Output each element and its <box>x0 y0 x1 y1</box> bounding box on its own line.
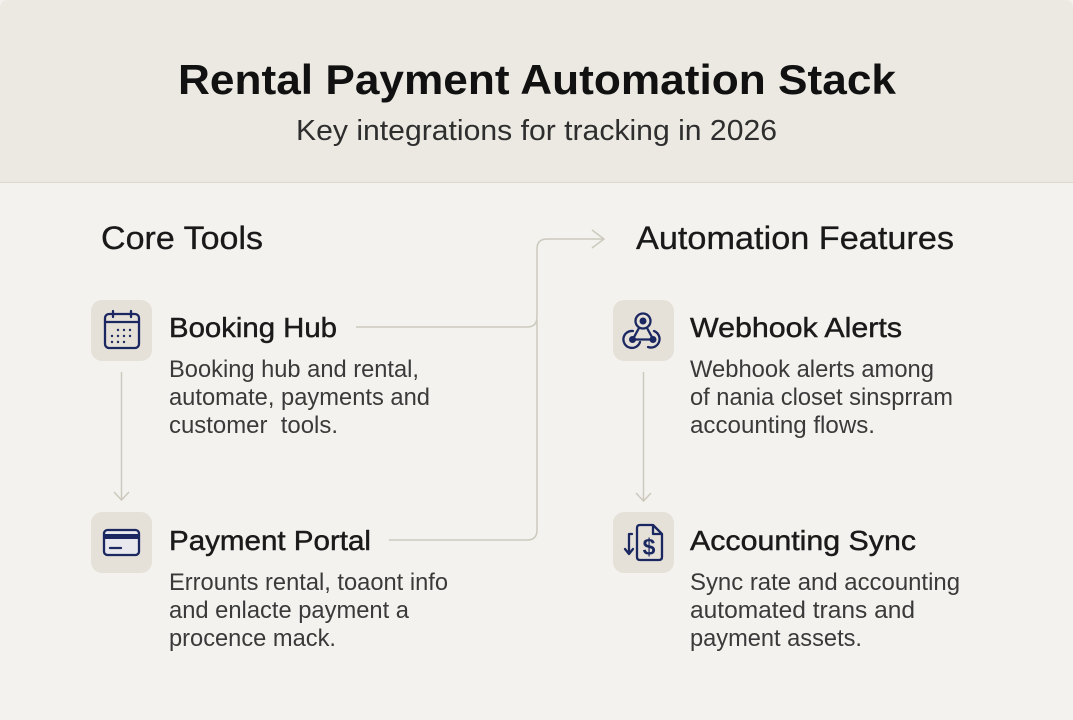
item description <box>690 356 953 439</box>
item title: Accounting Sync <box>690 525 916 556</box>
item description: Sync rate and accounting <box>690 569 960 596</box>
panel: payment portal <box>91 512 448 652</box>
icon: webhook <box>613 300 674 361</box>
item description <box>690 569 960 652</box>
icon: calendar <box>91 300 152 361</box>
item description: automated trans and <box>690 597 915 624</box>
item description: customer tools. <box>169 412 338 439</box>
icon: document with dollar: $ <box>643 534 656 560</box>
item description: automate, payments and <box>169 384 430 411</box>
item description: Booking hub and rental, <box>169 356 419 383</box>
title: Rental Payment Automation Stack <box>178 56 897 103</box>
item description <box>169 356 430 439</box>
item title: Payment Portal <box>169 525 371 556</box>
arrow: booking hub down to payment portal <box>114 372 129 500</box>
heading: automation features: Automation Features <box>636 220 954 256</box>
header band <box>0 0 1073 183</box>
arrow: payment portal to automation features <box>389 320 537 540</box>
item description: Errounts rental, toaont info <box>169 569 448 596</box>
icon: credit card <box>91 512 152 573</box>
icon: document with dollar <box>613 512 674 573</box>
item description: payment assets. <box>690 625 862 652</box>
item description: accounting flows. <box>690 412 875 439</box>
item description: of nania closet sinsprram <box>690 384 953 411</box>
subtitle: Key integrations for tracking in 2026 <box>296 115 777 147</box>
item description: procence mack. <box>169 625 336 652</box>
item title: Webhook Alerts <box>690 312 902 343</box>
item description <box>169 569 448 652</box>
item description: and enlacte payment a <box>169 597 410 624</box>
panel: booking hub <box>91 300 430 439</box>
panel: accounting sync <box>613 512 960 652</box>
arrow: booking hub to automation features <box>356 230 604 327</box>
heading: core tools: Core Tools <box>101 220 263 256</box>
arrow: webhook alerts down to accounting sync <box>636 372 651 501</box>
item description: Webhook alerts among <box>690 356 934 383</box>
panel: webhook alerts <box>613 300 953 439</box>
item title: Booking Hub <box>169 312 337 343</box>
